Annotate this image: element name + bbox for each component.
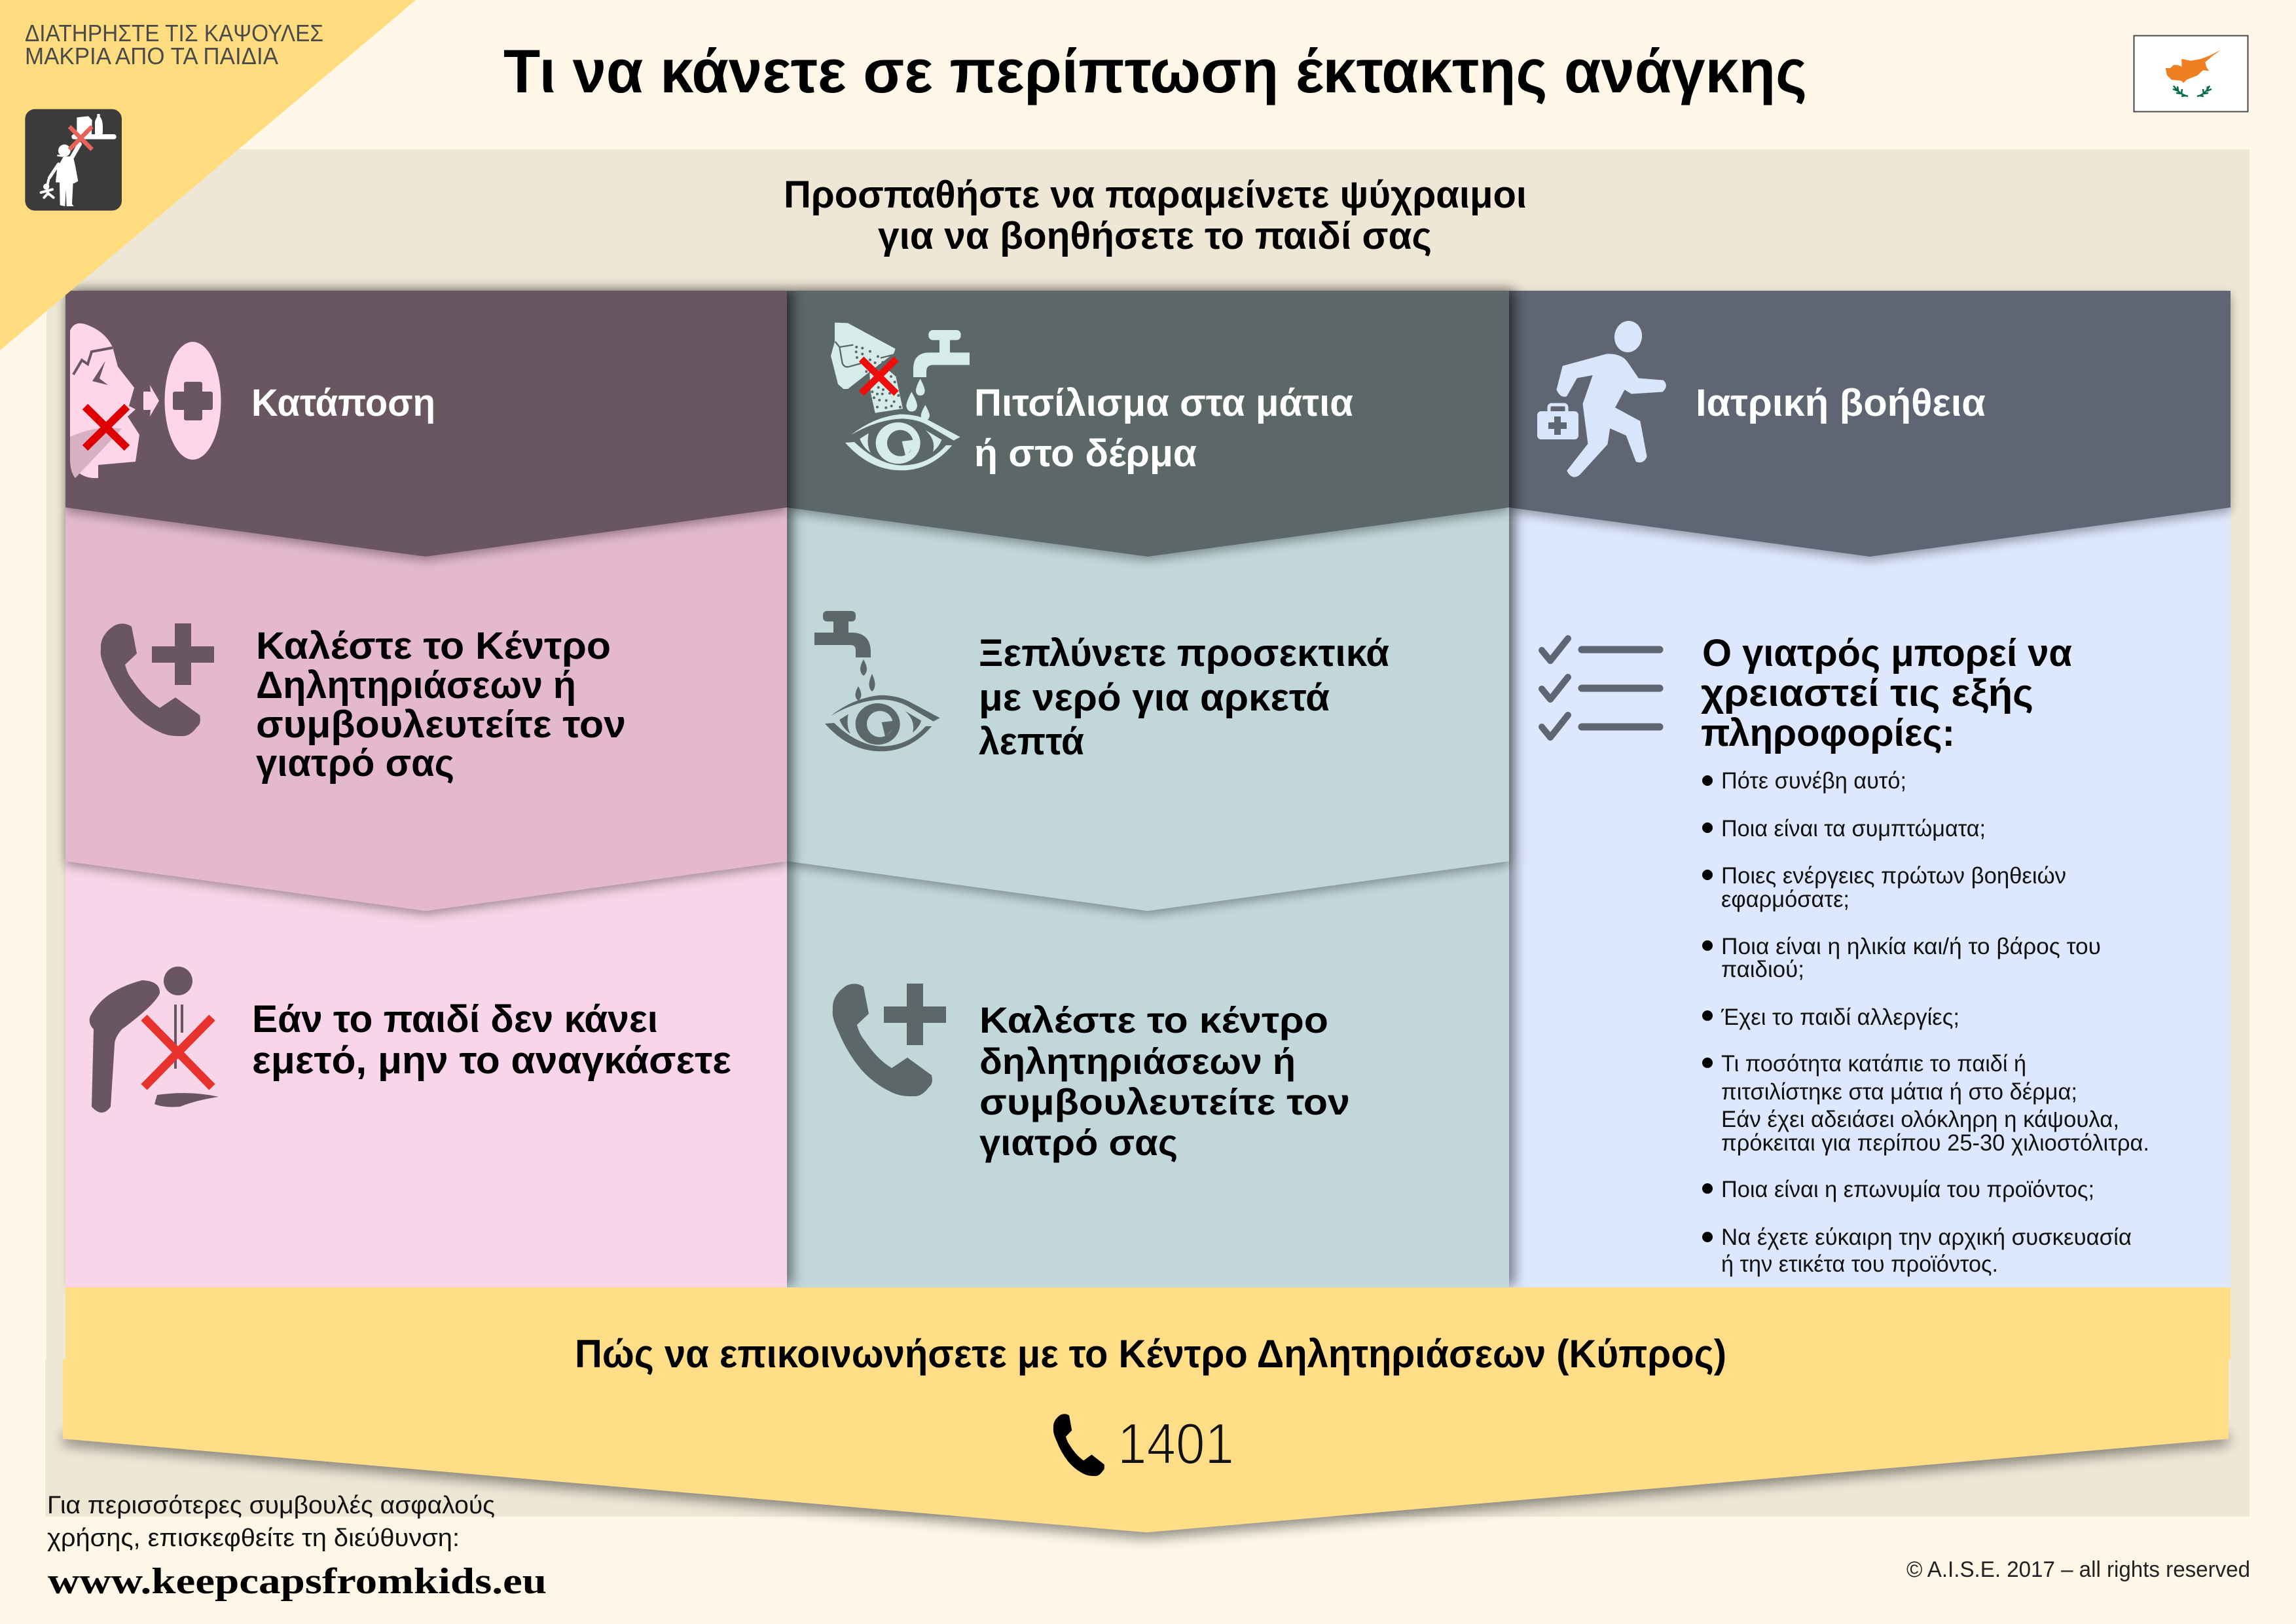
heading: medical help: Ιατρική βοήθεια bbox=[1696, 382, 1986, 424]
header: medical help bbox=[1509, 291, 2231, 557]
subtitle: Προσπαθήστε να παραμείνετε ψύχραιμοι bbox=[784, 174, 1527, 216]
icon: splash bottle, tap and eye bbox=[831, 323, 970, 470]
text: rinse with water: με νερό για αρκετά bbox=[979, 676, 1330, 719]
heading: splash: ή στο δέρμα bbox=[974, 432, 1197, 475]
phone number: 1401 bbox=[1118, 1411, 1234, 1476]
panel: contact poison centre banner bbox=[63, 1287, 2231, 1532]
footer: more safety advice: www.keepcapsfromkids.eu bbox=[48, 1561, 547, 1602]
text: keep capsules away from children: ΔΙΑΤΗΡΗΣΤΕ ΤΙΣ ΚΑΨΟΥΛΕΣ bbox=[25, 20, 323, 46]
mid section: rinse bbox=[787, 507, 1509, 911]
text: call poison centre: Δηλητηριάσεων ή bbox=[256, 664, 576, 707]
icon: running person with first aid kit bbox=[1537, 319, 1665, 476]
heading: ingestion: Κατάποση bbox=[251, 382, 435, 424]
text: do not force vomiting: εμετό, μην το αναγκάσετε bbox=[252, 1039, 731, 1082]
corner triangle bbox=[0, 0, 416, 350]
copyright: © A.I.S.E. 2017 – all rights reserved bbox=[1906, 1557, 2250, 1582]
heading: how to contact: Πώς να επικοινωνήσετε με το Κέντρο Δηλητηριάσεων (Κύπρος) bbox=[575, 1332, 1726, 1376]
list: information for the doctor: Ποιες ενέργειες πρώτων βοηθειών bbox=[1721, 863, 2066, 889]
banner shape bbox=[63, 1287, 2231, 1532]
icon: tap and eye bbox=[814, 611, 940, 751]
list: information for the doctor: ή την ετικέτα του προϊόντος. bbox=[1721, 1251, 1998, 1277]
list: information for the doctor: πρόκειται για περίπου 25-30 χιλιοστόλιτρα. bbox=[1721, 1130, 2149, 1156]
icon: face, arrow and medical cross bbox=[70, 323, 221, 478]
list: information for the doctor: Ποια είναι η ηλικία και/ή το βάρος του bbox=[1721, 934, 2101, 959]
icon: child reaching for shelf bbox=[25, 109, 122, 211]
panel: splash column bbox=[787, 291, 1509, 1287]
text: call poison centre: δηλητηριάσεων ή bbox=[979, 1041, 1296, 1082]
subtitle bbox=[784, 174, 1527, 257]
heading: splash bbox=[974, 382, 1353, 475]
text: call poison centre: συμβουλευτείτε τον bbox=[256, 703, 626, 746]
heading: doctor may need bbox=[1701, 632, 2072, 754]
icon: flag of Cyprus bbox=[2134, 35, 2248, 111]
subtitle: για να βοηθήσετε το παιδί σας bbox=[878, 215, 1432, 257]
panel: ingestion column bbox=[65, 291, 787, 1287]
icon: phone with plus bbox=[833, 984, 946, 1096]
text: do not force vomiting bbox=[252, 998, 731, 1082]
text: call poison centre: Καλέστε το Κέντρο bbox=[256, 625, 611, 667]
list: information for the doctor: εφαρμόσατε; bbox=[1721, 887, 1850, 912]
text: call poison centre: γιατρό σας bbox=[256, 742, 454, 784]
text: keep capsules away from children: ΜΑΚΡΙΑ ΑΠΟ ΤΑ ΠΑΙΔΙΑ bbox=[25, 43, 278, 69]
text: rinse with water: Ξεπλύνετε προσεκτικά bbox=[979, 632, 1389, 674]
heading: doctor may need: Ο γιατρός μπορεί να bbox=[1702, 632, 2072, 674]
text: rinse with water bbox=[979, 632, 1389, 763]
footer: more safety advice: Για περισσότερες συμβουλές ασφαλούς bbox=[47, 1492, 495, 1519]
icon: checklist bbox=[1542, 638, 1660, 737]
list: information for the doctor: Ποια είναι τα συμπτώματα; bbox=[1721, 816, 1986, 841]
panel: medical help column bbox=[1509, 291, 2231, 1287]
banner lower edge shadow bbox=[63, 1428, 2229, 1532]
text: rinse with water: λεπτά bbox=[979, 720, 1084, 763]
list: information for the doctor: παιδιού; bbox=[1721, 957, 1804, 982]
mid section: call bbox=[65, 507, 787, 911]
icon: do not induce vomiting bbox=[90, 967, 219, 1113]
footer: more safety advice: χρήσης, επισκεφθείτε τη διεύθυνση: bbox=[47, 1524, 460, 1552]
text: call poison centre: γιατρό σας bbox=[979, 1122, 1178, 1163]
list: information for the doctor: Πότε συνέβη αυτό; bbox=[1721, 768, 1906, 794]
heading: doctor may need: χρειαστεί τις εξής bbox=[1701, 672, 2033, 714]
list: information for the doctor: Έχει το παιδί αλλεργίες; bbox=[1721, 1005, 1959, 1030]
list: information for the doctor bbox=[1702, 768, 2149, 1277]
text: call poison centre bbox=[979, 999, 1350, 1163]
footer: more safety advice bbox=[47, 1492, 547, 1602]
header: splash bbox=[787, 291, 1509, 557]
heading: splash: Πιτσίλισμα στα μάτια bbox=[974, 382, 1353, 424]
text: call poison centre: Καλέστε το κέντρο bbox=[979, 999, 1328, 1041]
title: Τι να κάνετε σε περίπτωση έκτακτης ανάγκης bbox=[503, 37, 1807, 105]
list: information for the doctor: Να έχετε εύκαιρη την αρχική συσκευασία bbox=[1721, 1225, 2132, 1250]
text: call poison centre: συμβουλευτείτε τον bbox=[979, 1081, 1350, 1122]
text: keep capsules away from children bbox=[25, 20, 323, 69]
header: ingestion bbox=[65, 291, 787, 557]
text: call poison centre bbox=[256, 625, 626, 784]
list: information for the doctor: Εάν έχει αδειάσει ολόκληρη η κάψουλα, bbox=[1721, 1107, 2119, 1132]
list: information for the doctor: Ποια είναι η επωνυμία του προϊόντος; bbox=[1721, 1177, 2094, 1202]
heading: doctor may need: πληροφορίες: bbox=[1701, 712, 1955, 754]
list: information for the doctor: πιτσιλίστηκε στα μάτια ή στο δέρμα; bbox=[1721, 1079, 2077, 1105]
list: information for the doctor: Τι ποσότητα κατάπιε το παιδί ή bbox=[1721, 1051, 2026, 1077]
icon: phone bbox=[1053, 1414, 1104, 1476]
icon: phone with plus bbox=[101, 623, 214, 736]
text: do not force vomiting: Εάν το παιδί δεν κάνει bbox=[252, 998, 658, 1041]
